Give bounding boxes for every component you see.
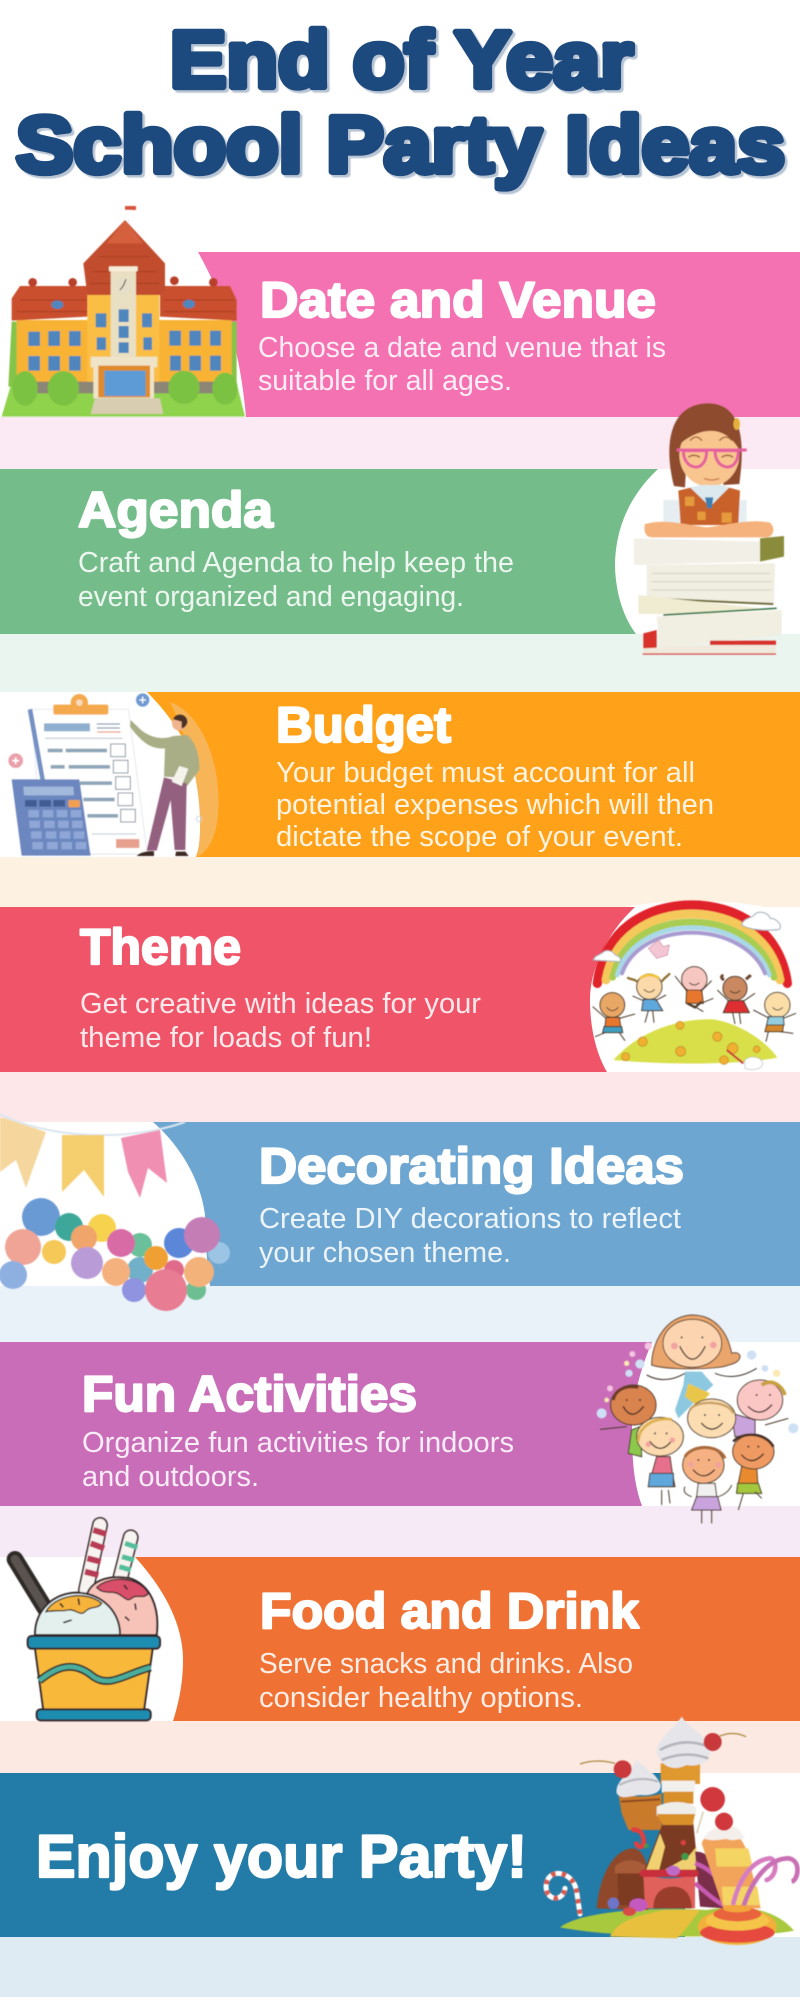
body text: [259, 1203, 681, 1269]
orange band: [0, 1557, 800, 1721]
icon: teacher and children: [597, 1315, 798, 1523]
icon: rainbow and children: [593, 905, 796, 1070]
purple band: [0, 1342, 652, 1506]
white cut-out: [0, 1557, 183, 1721]
green band: [0, 469, 658, 634]
title: [16, 15, 785, 189]
heading: Enjoy your Party!: [36, 1823, 527, 1890]
icon: clipboard, calculator and man: [8, 693, 202, 856]
panel: Theme: [0, 901, 800, 1072]
icon: watercolour balloons: [0, 1198, 230, 1311]
body text: [82, 1427, 514, 1493]
heading: Budget: [276, 697, 451, 753]
red band: [0, 907, 635, 1072]
body text: potential expenses which will then: [276, 789, 714, 821]
panel: Decorating Ideas: [0, 1114, 800, 1311]
body text: [78, 547, 514, 613]
white backing: [680, 1773, 800, 1937]
panel: Enjoy your Party: [0, 1717, 800, 1945]
body text: [259, 1648, 633, 1714]
light orange arc: [170, 702, 219, 857]
blue band: [0, 1122, 800, 1286]
panel: Agenda: [0, 403, 800, 654]
panel: Date and Venue: [2, 206, 800, 417]
body text: Create DIY decorations to reflect: [259, 1203, 681, 1235]
body text: and outdoors.: [82, 1461, 259, 1493]
body text: your chosen theme.: [259, 1237, 511, 1269]
orange band: [0, 692, 800, 857]
white cut-out: [0, 692, 202, 857]
body text: theme for loads of fun!: [80, 1022, 372, 1054]
body text: Serve snacks and drinks. Also: [259, 1648, 633, 1680]
icon: school building: [2, 206, 245, 417]
body text: Choose a date and venue that is: [258, 332, 666, 364]
heading: Decorating Ideas: [259, 1138, 684, 1194]
body text: [258, 332, 666, 397]
body text: Get creative with ideas for your: [80, 988, 481, 1020]
heading: Agenda: [78, 482, 274, 538]
body text: Your budget must account for all: [276, 757, 695, 789]
white backing: [590, 907, 800, 1072]
icon: bunting: [0, 1114, 185, 1198]
heading: Food and Drink: [260, 1583, 639, 1639]
dark blue band: [0, 1773, 685, 1937]
body text: dictate the scope of your event.: [276, 821, 683, 853]
title: End of Year: [170, 15, 633, 104]
body text: Organize fun activities for indoors: [82, 1427, 514, 1459]
body text: Craft and Agenda to help keep the: [78, 547, 514, 579]
panel: Budget: [0, 692, 800, 857]
heading: Theme: [80, 919, 241, 975]
pink band: [198, 252, 800, 417]
body text: event organized and engaging.: [78, 581, 464, 613]
heading: Fun Activities: [82, 1366, 417, 1422]
body text: consider healthy options.: [259, 1682, 583, 1714]
white cut-out: [0, 1122, 210, 1286]
icon: ice cream cup: [15, 1525, 160, 1720]
body text: [276, 757, 714, 853]
heading: Date and Venue: [260, 272, 656, 328]
title: School Party Ideas: [16, 100, 785, 189]
icon: girl on books: [634, 403, 784, 654]
body text: [80, 988, 481, 1054]
body text: suitable for all ages.: [258, 365, 512, 397]
white backing: [600, 469, 800, 634]
panel: Food and Drink: [0, 1525, 800, 1721]
icon: candy castle: [546, 1717, 797, 1945]
panel: Fun Activities: [0, 1315, 800, 1523]
white backing: [620, 1342, 800, 1506]
